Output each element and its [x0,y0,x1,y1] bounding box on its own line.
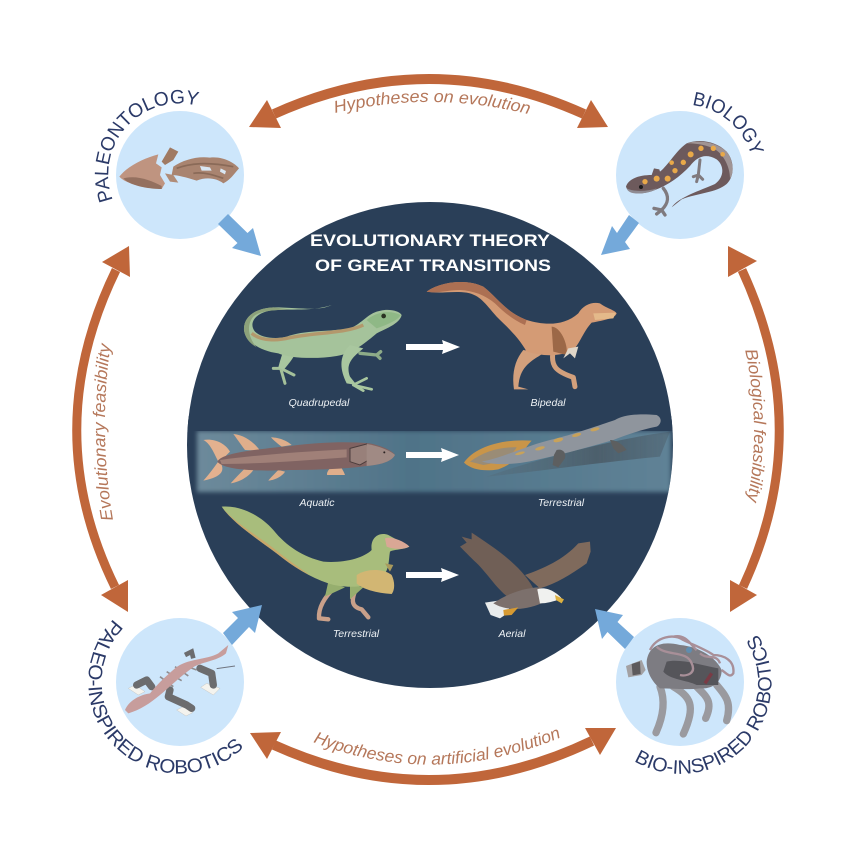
title [310,231,551,275]
water band background [187,416,677,492]
label: hypotheses on evolution: Hypotheses on evolution [335,92,530,114]
infographic diagram [72,74,784,785]
label: bio-inspired robotics: BIO-INSPIRED ROBOTICS [635,636,772,774]
arrow: top double-headed hypotheses on evolution [249,79,608,128]
caption: bipedal: Bipedal [530,397,566,409]
caption: terrestrial (salamander): Terrestrial [538,497,585,509]
illustration: quadrupedal lizard [244,305,402,391]
arrow: paleo-inspired robotics to theory [223,605,262,645]
caption: aquatic: Aquatic [298,497,335,509]
label: biological feasibility: Biological feasibility [745,350,766,504]
arrow: left double-headed evolutionary feasibility [77,246,130,612]
arrow: bottom double-headed hypotheses on artificial evolution [250,728,616,780]
caption: terrestrial (dinosaur): Terrestrial [333,628,380,640]
illustration: aquatic fish [203,434,395,483]
arrow: terrestrial to aerial [406,568,459,582]
arrow: bio-inspired robotics to theory [595,609,634,649]
icon: spotted salamander [626,141,733,215]
label: paleontology: PALEONTOLOGY [94,90,200,202]
illustration: feathered dinosaur [222,506,409,619]
arrow: quadrupedal to bipedal [406,340,460,354]
arrow: right double-headed biological feasibility [728,246,779,612]
label: biology: BIOLOGY [694,92,764,151]
panel: paleo-inspired robotics circle [116,618,244,746]
caption: quadrupedal: Quadrupedal [289,397,350,409]
title: OF GREAT TRANSITIONS [315,256,551,275]
illustration: terrestrial salamander [464,414,670,477]
panel: paleontology circle [116,111,244,239]
icon: fossil [119,147,239,189]
label: paleo-inspired robotics: PALEO-INSPIRED ROBOTICS [88,620,242,774]
illustration: bald eagle [460,533,591,618]
arrow: aquatic to terrestrial [406,448,459,462]
caption: aerial: Aerial [498,628,526,640]
panel: main circle [187,202,673,688]
panel: bio-inspired robotics circle [616,618,744,746]
icon: robot lizard [125,645,235,716]
arrow: biology to theory [601,215,639,255]
label: evolutionary feasibility: Evolutionary feasibility [92,342,113,520]
illustration: bipedal dinosaur [427,282,617,389]
panel: biology circle [616,111,744,239]
label: hypotheses on artificial evolution: Hypotheses on artificial evolution [314,730,560,765]
arrow: paleontology to theory [218,214,261,256]
icon: robot dog [626,636,733,734]
title: EVOLUTIONARY THEORY [310,231,551,250]
